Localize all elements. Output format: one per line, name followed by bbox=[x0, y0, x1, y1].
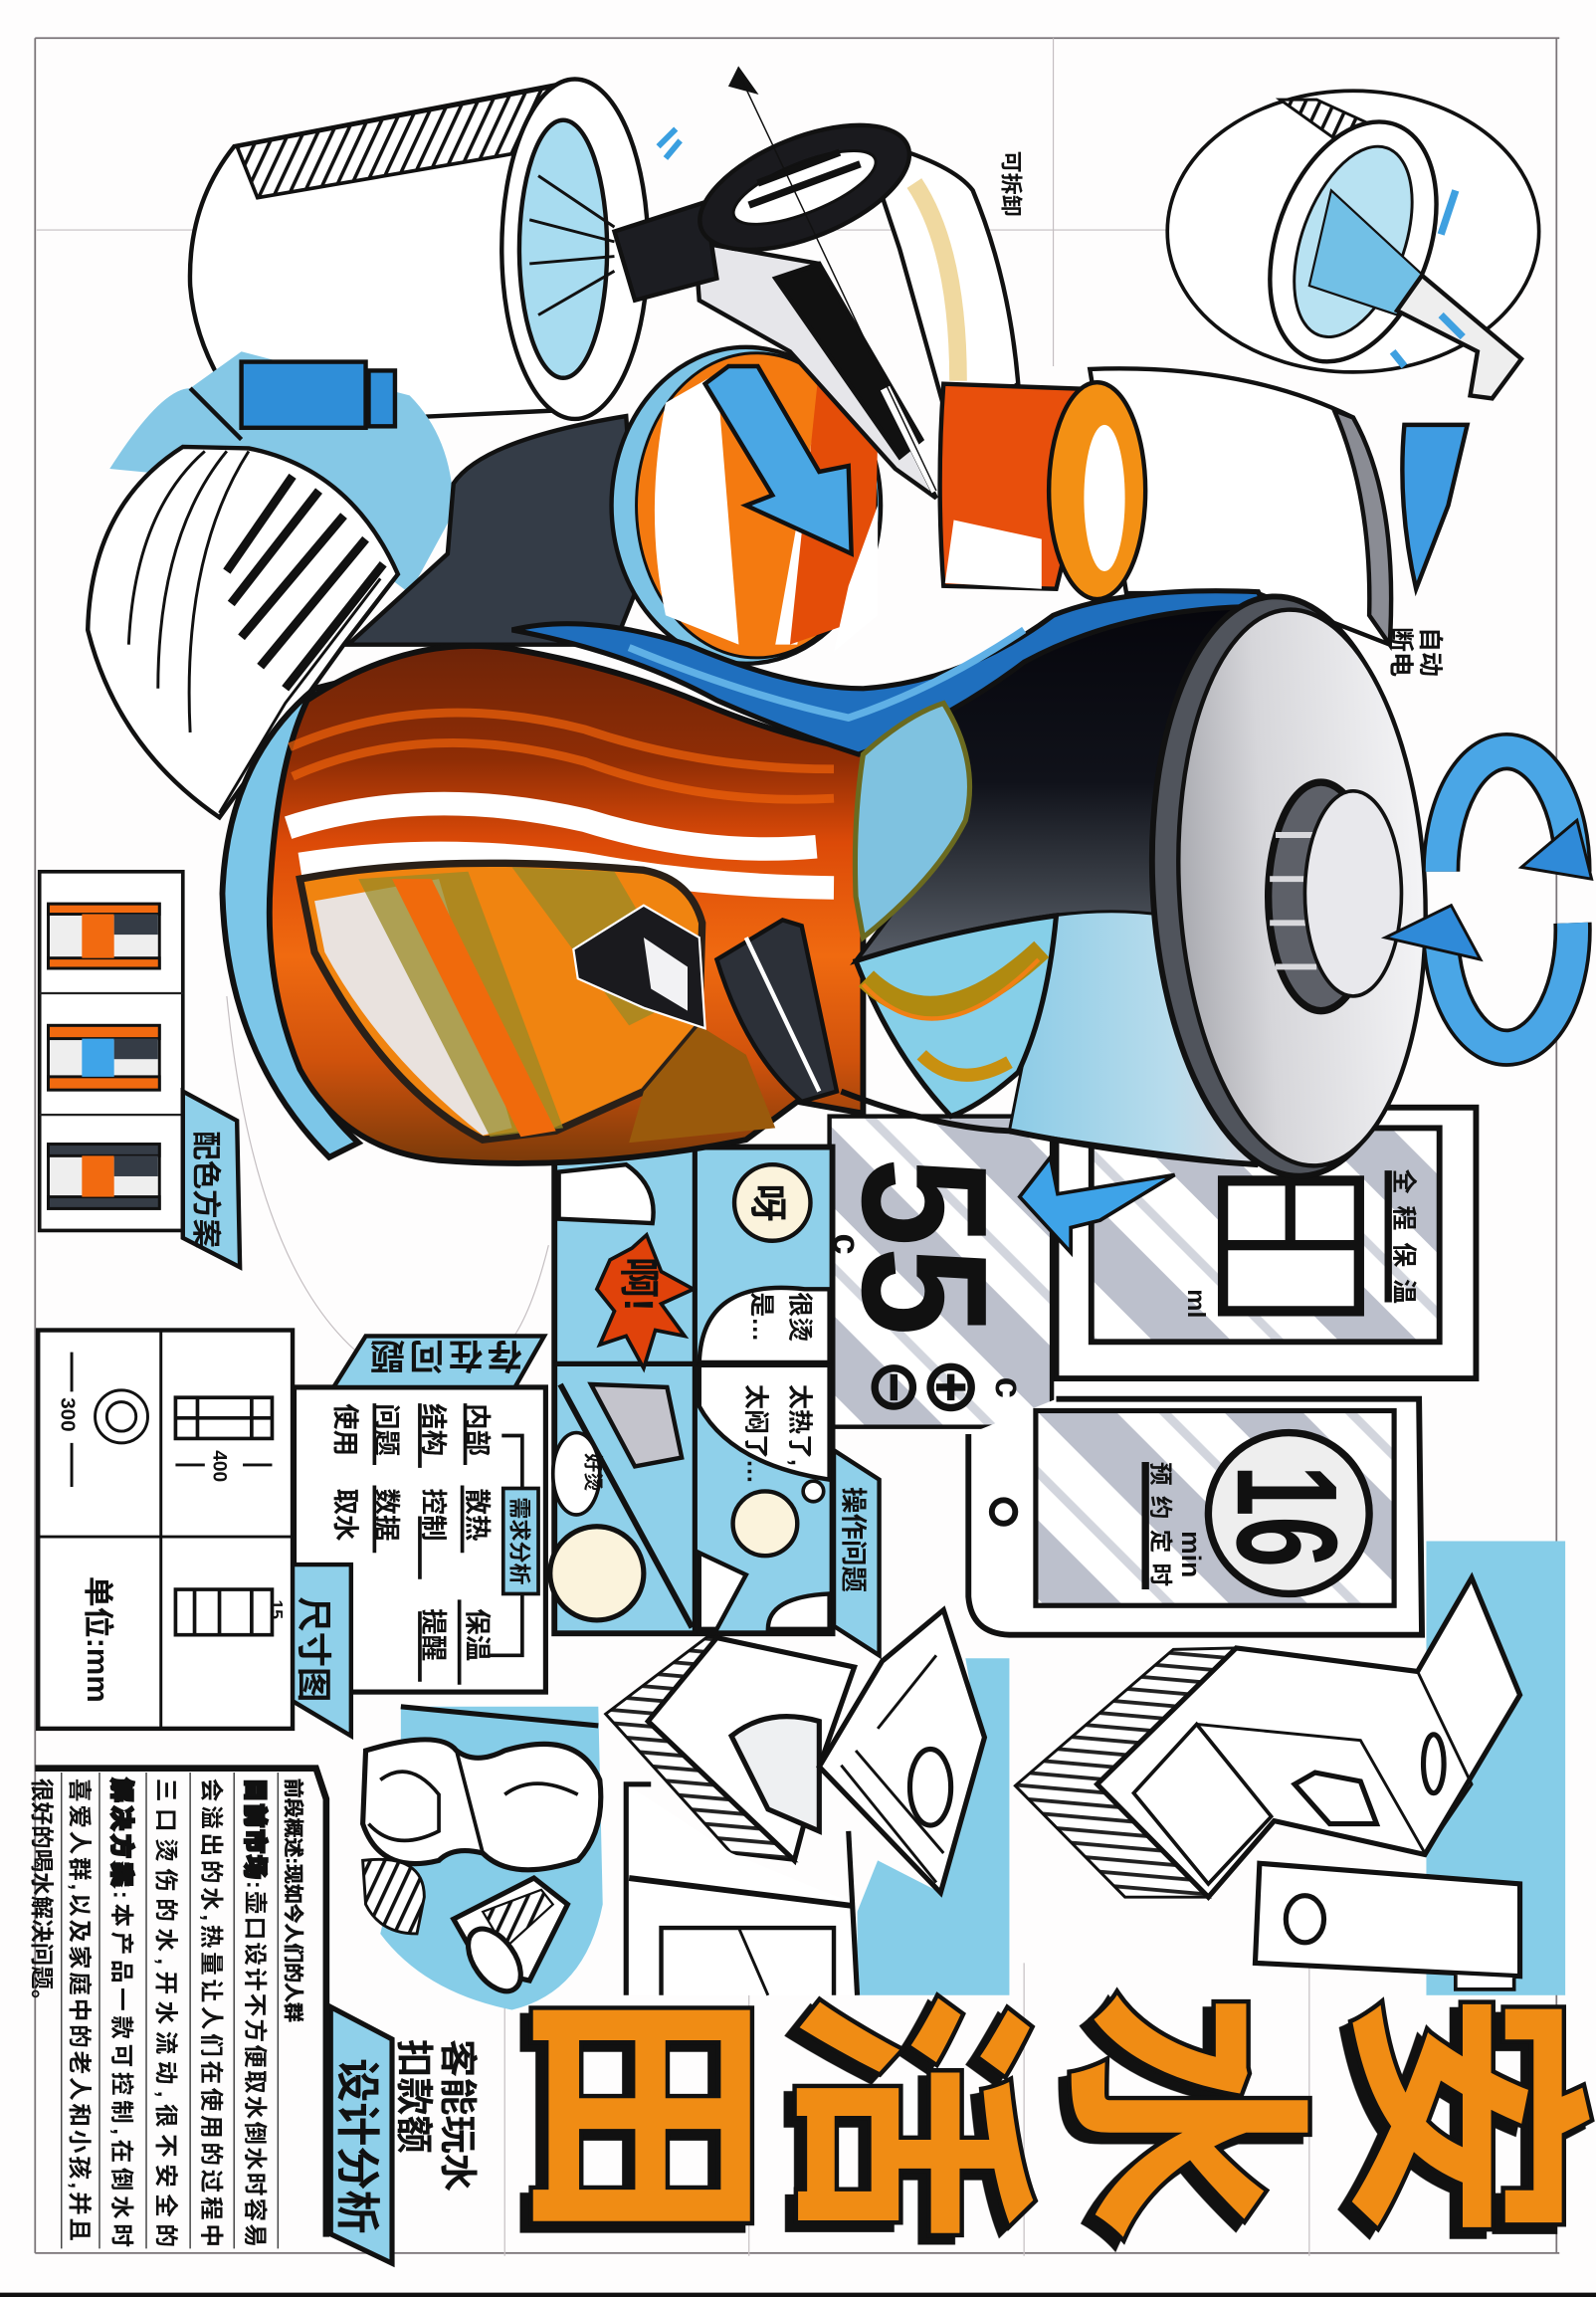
label: dimension chart: 尺寸图 bbox=[294, 1596, 332, 1702]
caption: customer function bbox=[392, 2039, 479, 2192]
button minus bbox=[875, 1368, 912, 1406]
speech text 2 bbox=[741, 1384, 813, 1484]
sketch: hand-held nozzle bbox=[614, 71, 1018, 498]
kettle shell rim bbox=[222, 681, 358, 1157]
title: 水 bbox=[1041, 1989, 1322, 2241]
tree nodes: 控制 bbox=[418, 1488, 448, 1541]
title bbox=[499, 1989, 1596, 2241]
sketch: circular detail view bbox=[1167, 91, 1539, 398]
tree nodes: 结构 bbox=[418, 1403, 448, 1456]
label: auto power-off bbox=[1387, 627, 1444, 677]
sketch: dark cylinder segment bbox=[348, 416, 638, 645]
screen bbox=[1092, 1128, 1440, 1342]
phone button bbox=[992, 1500, 1015, 1524]
units caption: 单位:mm bbox=[81, 1576, 115, 1703]
note lines: 解决方案 :本产品一款可控制,在倒水时 bbox=[109, 1778, 136, 2247]
button plus bbox=[930, 1366, 971, 1408]
title: 安 bbox=[1321, 1989, 1596, 2241]
swatch 3 bbox=[49, 1145, 159, 1208]
kettle red body bbox=[270, 646, 863, 1163]
label: usability problem: 操作问题 bbox=[838, 1487, 868, 1592]
sketch: control box bbox=[1255, 1863, 1520, 1989]
comic: tablet bbox=[591, 1384, 682, 1466]
gear knob bbox=[1269, 782, 1374, 1011]
sketch: blue concept study bbox=[363, 1707, 603, 2010]
note lines: 会溢出的水,热量让人们在使用的过程中 bbox=[198, 1778, 224, 2247]
label: design analysis: 设计分析 bbox=[332, 2058, 381, 2234]
phone screen bbox=[1036, 1410, 1394, 1605]
panel: temperature display bbox=[824, 1117, 1052, 1427]
lower brown panel bbox=[629, 1025, 775, 1143]
height 400: 400 bbox=[209, 1450, 230, 1482]
label: colour scheme: 配色方案 bbox=[189, 1131, 222, 1248]
panel: colour variants bbox=[40, 872, 183, 1230]
tree nodes: 问题 bbox=[371, 1403, 401, 1456]
speech bubble 1 bbox=[699, 1288, 830, 1362]
speech text 2: 太热了, bbox=[785, 1384, 813, 1466]
burst word: 啊! bbox=[616, 1257, 662, 1312]
icon: rotation arrows bbox=[1385, 751, 1592, 1048]
top cap bbox=[1165, 603, 1439, 1172]
icon: digit display bbox=[1223, 1180, 1359, 1311]
spout highlight bbox=[644, 938, 688, 1011]
side view bbox=[175, 1589, 272, 1635]
sketch: blue spout bbox=[1402, 425, 1468, 589]
label: existing problems bbox=[333, 1336, 544, 1387]
light blue lower body bbox=[1009, 912, 1258, 1164]
tree nodes: 保温 bbox=[462, 1608, 492, 1661]
title: 田 bbox=[499, 1989, 781, 2241]
blue pointer arrow bbox=[1020, 1157, 1175, 1253]
upper glass window bbox=[855, 704, 970, 938]
comic: thought dots bbox=[803, 1481, 824, 1502]
label: existing problems: 存在问题 bbox=[370, 1336, 522, 1374]
kettle black handle bbox=[856, 603, 1266, 961]
panel: user-problem comic bbox=[550, 1148, 833, 1633]
comic: face 3 bbox=[550, 1527, 644, 1620]
top cap rim bbox=[1137, 589, 1437, 1183]
sketch: device left bbox=[606, 1610, 984, 1893]
label: auto power-off: 自动 bbox=[1416, 627, 1444, 677]
sketch: orange ring with blue arrow bbox=[612, 347, 881, 664]
note lines: 三口烫伤的水,开水流动,很不安全的 bbox=[153, 1778, 179, 2247]
neck collar bbox=[716, 920, 837, 1102]
comic: character 2 bbox=[733, 1491, 797, 1556]
tree nodes: 数据 bbox=[371, 1488, 401, 1541]
comic bubble bbox=[553, 1433, 600, 1515]
panel: dimension drawing bbox=[38, 1331, 293, 1729]
white highlight bands bbox=[289, 804, 834, 888]
caption: customer function: 客能玩水 bbox=[436, 2039, 479, 2192]
speech bubble 2 bbox=[699, 1365, 830, 1480]
front view bbox=[175, 1397, 272, 1438]
label: dimension chart bbox=[290, 1565, 351, 1736]
tree header: 需求分析 bbox=[507, 1497, 532, 1585]
blue paint background: right column bbox=[1426, 1541, 1565, 1995]
degree unit: c bbox=[825, 1233, 868, 1255]
note lines: 前段概述:现如今人们的人群 bbox=[282, 1778, 304, 2022]
tree header bbox=[503, 1488, 538, 1593]
temperature digits: 55 bbox=[824, 1157, 1023, 1336]
label: detachable nozzle: 可拆卸 bbox=[999, 151, 1024, 217]
label: usability problem bbox=[834, 1450, 880, 1655]
side dimension: 15 bbox=[267, 1599, 287, 1619]
kettle spout bbox=[573, 906, 705, 1028]
window reflections bbox=[314, 879, 512, 1136]
tree nodes: 使用 bbox=[330, 1403, 360, 1456]
phone caption: 预约定时 bbox=[1148, 1462, 1174, 1586]
speech text 1 bbox=[747, 1292, 813, 1342]
caption: customer function: 扣款额 bbox=[392, 2039, 435, 2154]
comic: kettle mug bbox=[559, 1164, 654, 1223]
speech text 1: 很烫 bbox=[785, 1292, 813, 1342]
unit: ml bbox=[1182, 1289, 1210, 1319]
panel: problem tree bbox=[295, 1336, 545, 1692]
celsius mark: c bbox=[987, 1377, 1030, 1398]
speech text 2: 太闷了… bbox=[741, 1384, 769, 1484]
timer digits: 16 bbox=[1207, 1465, 1368, 1567]
caption rule bbox=[1143, 1462, 1148, 1589]
main kettle illustration bbox=[222, 589, 1439, 1183]
panel: keep-warm screen bbox=[1056, 1108, 1476, 1378]
front dimension arrows bbox=[175, 1464, 272, 1466]
lower glass window bbox=[856, 916, 1056, 1117]
sketch: open cylinder bbox=[190, 79, 681, 425]
comic: character 1 bbox=[734, 1164, 810, 1241]
top view bbox=[72, 1353, 147, 1487]
kettle orange window bbox=[299, 863, 702, 1140]
kettle blue band bbox=[512, 591, 1266, 754]
gear teeth bbox=[1270, 835, 1316, 966]
comic bubble word: 好烫 bbox=[582, 1453, 604, 1491]
note lines: 目前市场 :壶口设计不方便取水倒水时容易 bbox=[242, 1778, 269, 2247]
timer unit: min bbox=[1176, 1531, 1206, 1577]
timer dial bbox=[1208, 1433, 1369, 1593]
tree nodes: 内部 bbox=[462, 1403, 492, 1456]
note lines: 喜爱人群,以及家庭中的老人和小孩,并且 bbox=[67, 1778, 94, 2241]
comic: tablet scene bbox=[560, 1384, 692, 1627]
tree nodes bbox=[330, 1403, 492, 1661]
tree nodes: 取水 bbox=[330, 1488, 360, 1542]
sketch: detached kettle body bbox=[940, 368, 1391, 645]
dimension 300: 300 bbox=[57, 1397, 80, 1432]
caption rule bbox=[1386, 1170, 1391, 1303]
label: auto power-off: 断电 bbox=[1387, 627, 1415, 677]
tree nodes: 散热 bbox=[462, 1488, 492, 1541]
note lines bbox=[29, 1778, 304, 2247]
body tonal stripes bbox=[290, 713, 834, 799]
label: colour scheme bbox=[183, 1092, 240, 1267]
knob top bbox=[1304, 791, 1401, 996]
comic: burst bbox=[597, 1235, 694, 1368]
label: design analysis bbox=[330, 2007, 392, 2263]
panel: analysis notes bbox=[29, 1769, 326, 2248]
speech text 1: 是… bbox=[747, 1292, 775, 1342]
screen caption: 全程保温 bbox=[1390, 1169, 1418, 1304]
tree connectors bbox=[374, 1403, 522, 1685]
tree nodes: 提醒 bbox=[418, 1608, 448, 1661]
comic: arm and mug bbox=[699, 1553, 830, 1629]
title: 活 bbox=[765, 1989, 1047, 2241]
comic: face word: 呀 bbox=[746, 1183, 789, 1222]
sketch: ventilated base with blue tube bbox=[88, 351, 454, 817]
swatch 1 bbox=[49, 904, 159, 968]
sketch: device right bbox=[1015, 1577, 1520, 1897]
panel: smartphone timer bbox=[968, 1399, 1422, 1635]
blue paint background: middle column bbox=[858, 1658, 1009, 1995]
note lines: 很好的喝水解决问题。 bbox=[29, 1778, 55, 2012]
lower body outline bbox=[841, 1092, 1258, 1164]
sketch: base frame bbox=[626, 1784, 858, 1995]
swatch 2 bbox=[49, 1025, 159, 1090]
